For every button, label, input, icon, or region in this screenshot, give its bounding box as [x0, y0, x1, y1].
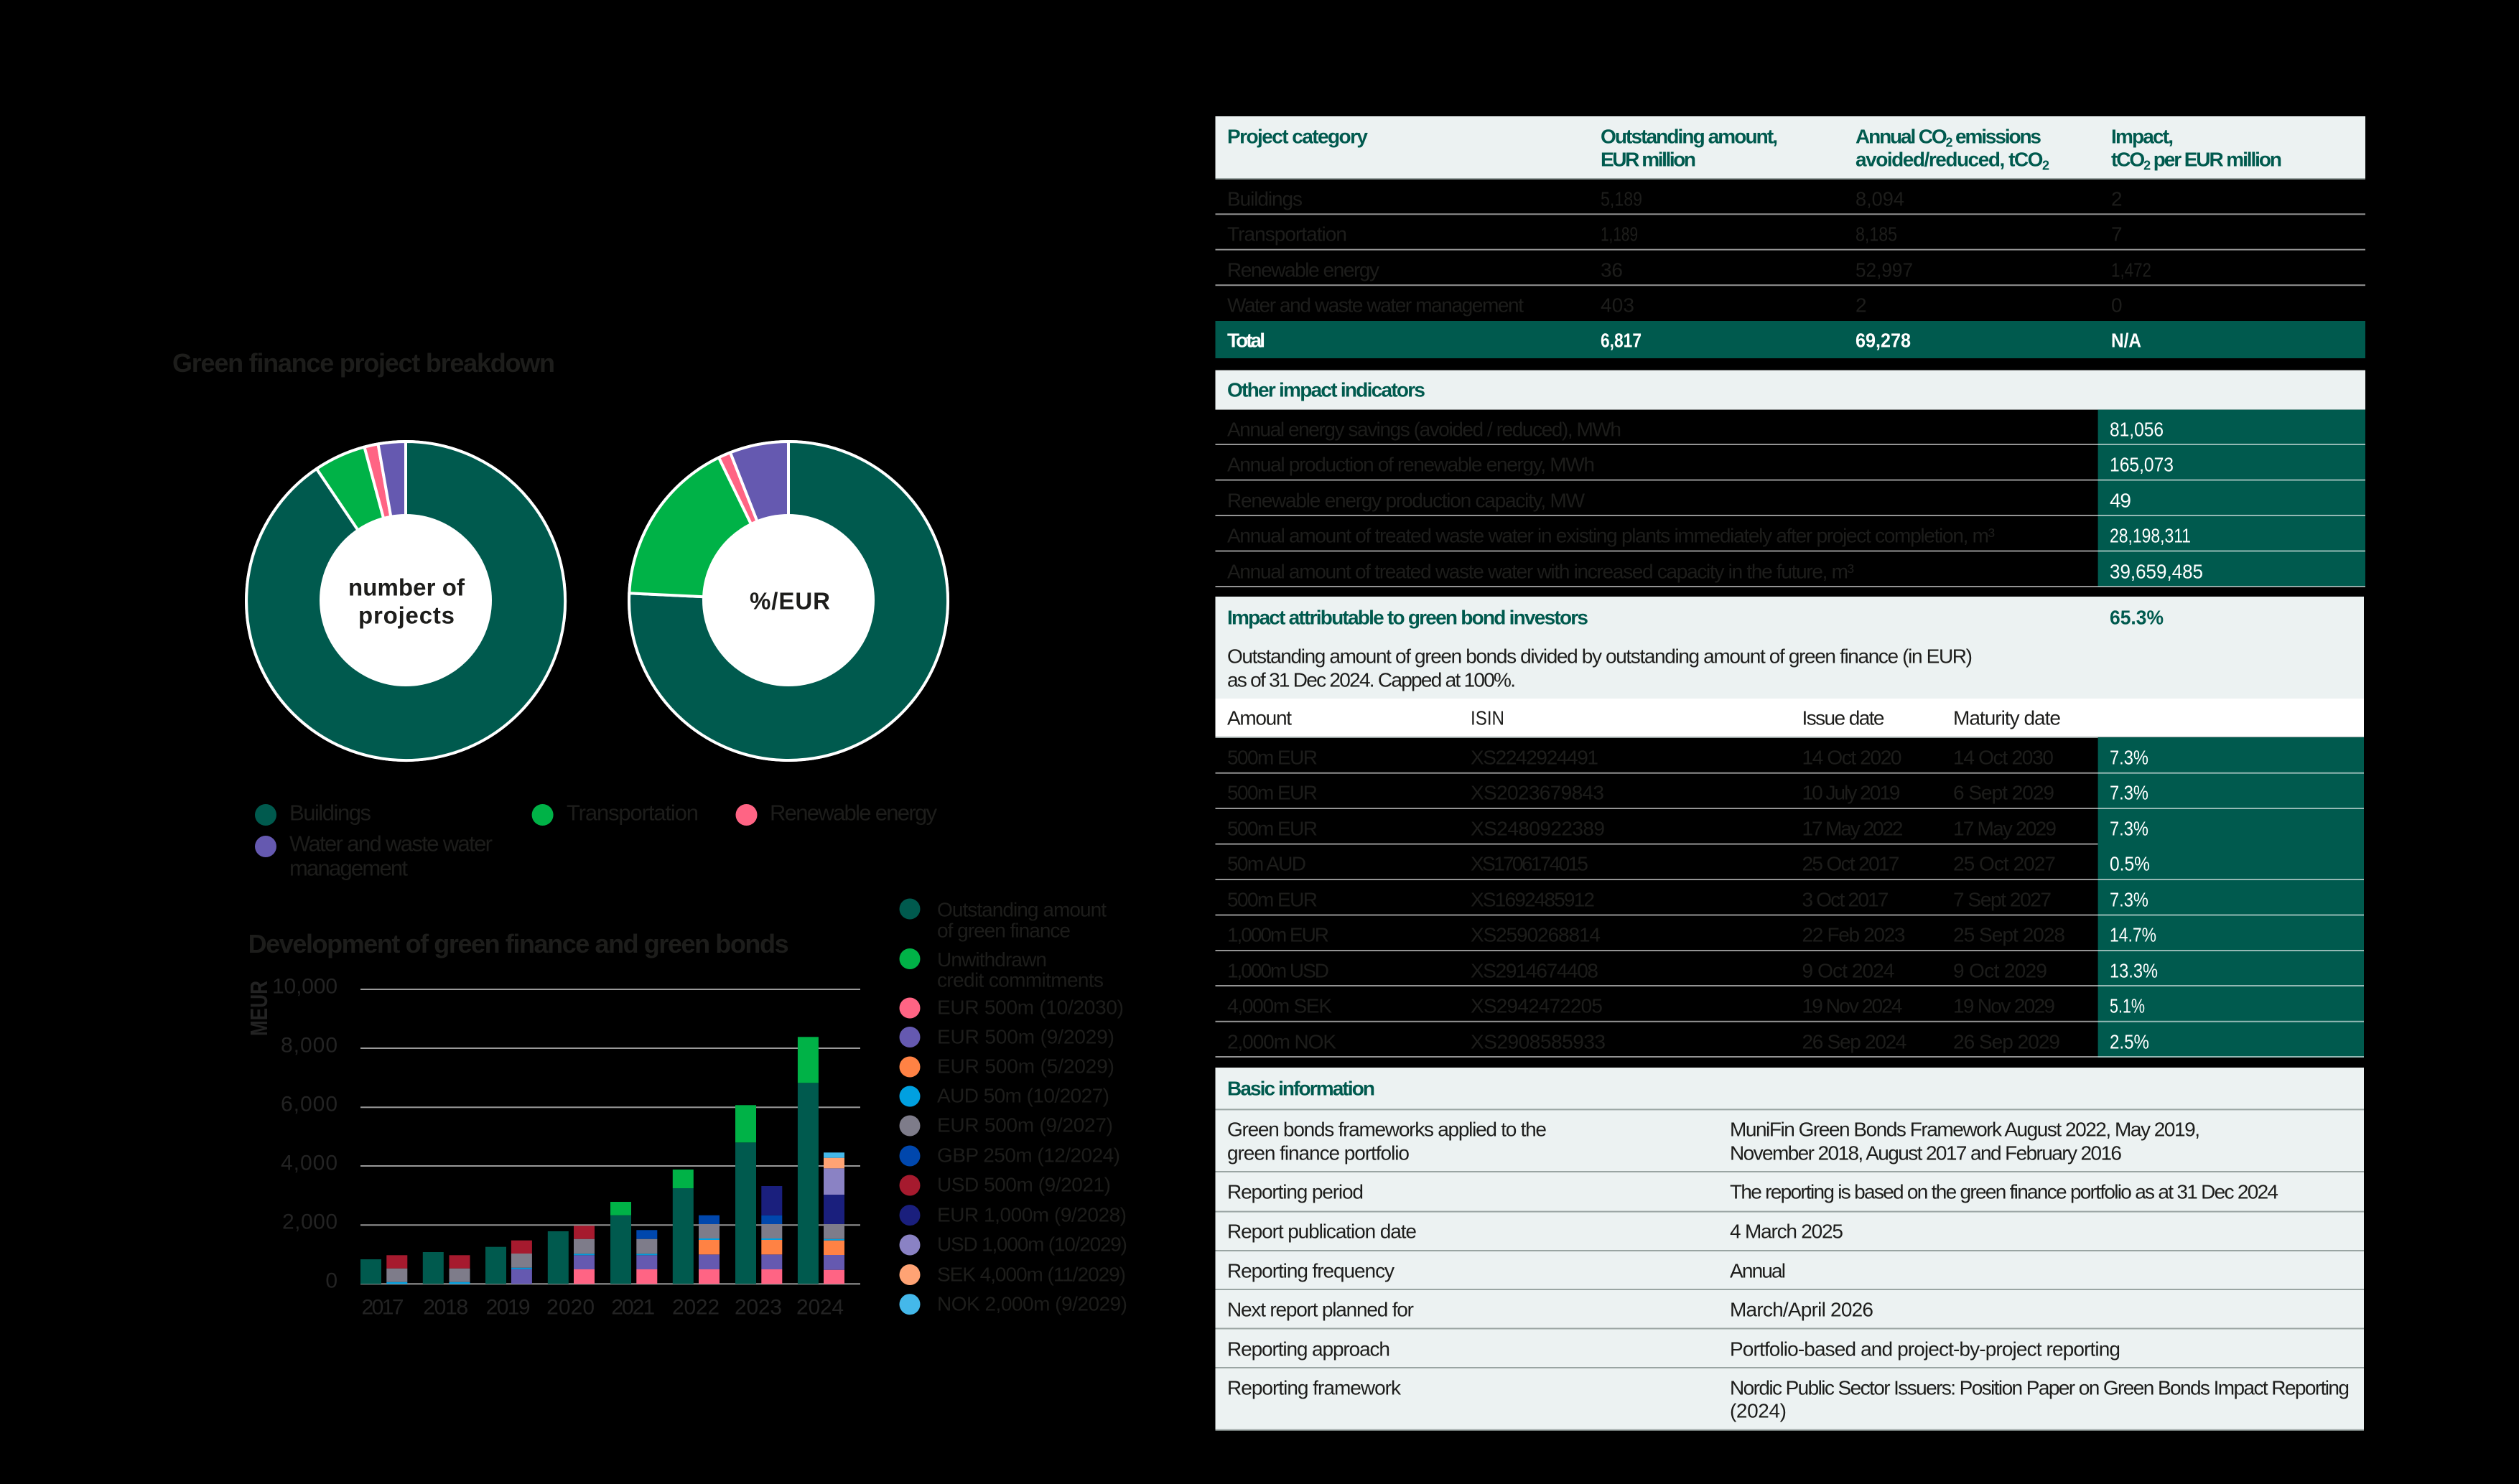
bond rows: 7.3%: [2110, 781, 2148, 804]
row: Transportation: 1,189: [1601, 223, 1638, 246]
bond table column headers: Maturity date: [1953, 706, 2061, 729]
bond rows: 5.1%: [2110, 995, 2145, 1017]
table header: emissions: [1951, 125, 2041, 148]
bond table column headers: Issue date: [1802, 706, 1884, 729]
row: Transportation: 7: [2111, 223, 2123, 246]
bond rows: 17 May 2029: [1953, 817, 2057, 840]
bond rows: 25 Oct 2017: [1802, 853, 1900, 874]
heading: Development of green finance and green bonds: Development of green finance and green bonds: [248, 929, 789, 958]
row: Total: Total: [1227, 329, 1265, 352]
bond rows: 14.7%: [2110, 923, 2156, 946]
row: Total: N/A: [2111, 329, 2141, 352]
green bond stacked bars: [386, 1152, 844, 1284]
row: frequency: Annual: [1730, 1259, 1786, 1282]
row: Total: [1215, 321, 2365, 358]
y axis labels: 6,000: [281, 1093, 337, 1116]
legend: project categories: Transportation: [567, 800, 699, 826]
panel: impact attributable to green bond investors: [1215, 597, 2364, 1058]
section heading: Basic information: [1227, 1077, 1375, 1100]
bond rows: XS2914674408: [1471, 959, 1598, 982]
bond rows: 17 May 2022: [1802, 817, 1903, 840]
legend: green finance and bonds: USD 1,000m (10/2029): [937, 1233, 1127, 1255]
bond rows: XS2242924491: [1471, 747, 1598, 768]
row: Total: 6,817: [1601, 329, 1642, 352]
row: publication date: Report publication date: [1227, 1221, 1417, 1242]
row: Buildings: [1215, 188, 2365, 215]
row: frameworks: green finance portfolio: [1227, 1142, 1410, 1165]
bond rows: 500m EUR: [1227, 781, 1318, 804]
legend: project categories: management: [289, 856, 408, 880]
row: framework: Nordic Public Sector Issuers: Position Paper on Green Bonds Impact Reporting: [1730, 1377, 2350, 1399]
bond rows: 7.3%: [2110, 747, 2148, 768]
legend: green finance and bonds: AUD 50m (10/2027): [937, 1084, 1109, 1107]
table header: EUR million: [1601, 148, 1696, 171]
bond rows: 7 Sept 2027: [1953, 889, 2052, 910]
bond rows: 19 Nov 2024: [1802, 995, 1903, 1017]
bond rows: 2.5%: [2110, 1031, 2149, 1053]
bond rows: 26 Sep 2024: [1802, 1031, 1907, 1053]
y axis title: MEUR: [246, 981, 272, 1036]
y axis labels: 2,000: [282, 1210, 337, 1233]
row: framework: (2024): [1730, 1400, 1787, 1422]
bond rows: 22 Feb 2023: [1802, 923, 1906, 946]
legend: green finance and bonds: EUR 1,000m (9/2028): [937, 1203, 1127, 1226]
bond rows: 6 Sept 2029: [1953, 781, 2054, 804]
row: Transportation: 8,185: [1856, 223, 1897, 246]
heading: Green finance project breakdown: Green finance project breakdown: [172, 348, 555, 378]
panel: other impact indicators: [1215, 370, 2365, 587]
bond table column headers: Amount: [1227, 706, 1292, 729]
x axis labels: 2018: [423, 1295, 468, 1320]
row: frameworks: [1215, 1109, 2364, 1165]
row: approach: [1215, 1328, 2364, 1360]
bond rows: 500m EUR: [1227, 889, 1318, 910]
row: Water and waste water management: [1227, 294, 2123, 316]
y axis labels: 10,000: [272, 975, 337, 998]
bond rows: [1215, 747, 2364, 1058]
bond rows: 50m AUD: [1227, 853, 1306, 874]
table header: Annual CO: [1856, 125, 1947, 148]
legend: green finance and bonds: USD 500m (9/2021): [937, 1173, 1111, 1196]
table header: 2: [1946, 135, 1953, 149]
x axis labels: 2021: [611, 1295, 655, 1320]
row: framework: [1215, 1367, 2364, 1431]
x axis labels: 2017: [362, 1295, 404, 1320]
row: Renewable energy: 36: [1601, 258, 1623, 281]
bond rows: 25 Sept 2028: [1953, 923, 2065, 946]
bond rows: 19 Nov 2029: [1953, 995, 2055, 1017]
row: Total: 69,278: [1856, 329, 1911, 352]
indicator rows: Renewable energy production capacity, MW: [1227, 490, 1586, 511]
indicator rows: 49: [2110, 490, 2131, 511]
indicator rows: Annual amount of treated waste water with increased capacity in the future, m³: [1227, 560, 1854, 583]
legend: green finance and bonds: Unwithdrawn: [937, 948, 1047, 971]
bond rows: 9 Oct 2024: [1802, 959, 1894, 982]
row: Buildings: Buildings: [1227, 188, 1303, 210]
row: Transportation: Transportation: [1227, 223, 1347, 246]
bond rows: 26 Sep 2029: [1953, 1031, 2060, 1053]
table header: Impact,: [2111, 125, 2174, 148]
bond rows: 2,000m NOK: [1227, 1031, 1336, 1053]
row: frameworks: November 2018, August 2017 and February 2016: [1730, 1142, 2122, 1165]
bond rows: 25 Oct 2027: [1953, 853, 2056, 874]
bond rows: 0.5%: [2110, 853, 2150, 874]
row: next report: [1215, 1289, 2364, 1321]
row: Water and waste water management: 403: [1601, 294, 1634, 316]
legend: project categories: Water and waste water: [289, 831, 493, 856]
bond rows: 500m EUR: [1227, 747, 1318, 768]
row: next report: March/April 2026: [1730, 1298, 1873, 1321]
row: Buildings: 5,189: [1601, 188, 1642, 210]
row: Buildings: 2: [2111, 188, 2123, 210]
legend: green finance and bonds: SEK 4,000m (11/2029): [937, 1264, 1126, 1285]
legend: green finance and bonds: EUR 500m (9/2027): [937, 1114, 1113, 1136]
legend: green finance and bonds: GBP 250m (12/2024): [937, 1144, 1120, 1166]
legend: project categories: Buildings: [289, 800, 371, 826]
section header: Other impact indicators: [1227, 379, 1425, 401]
bond rows: XS2023679843: [1471, 781, 1604, 804]
y axis labels: 4,000: [281, 1152, 337, 1175]
y axis labels: [272, 975, 337, 1292]
indicator rows: 165,073: [2110, 454, 2174, 475]
bond rows: 14 Oct 2020: [1802, 747, 1901, 768]
row: Renewable energy: 1,472: [2111, 258, 2151, 281]
bond rows: 1,000m USD: [1227, 959, 1329, 982]
bond rows: 1,000m EUR: [1227, 923, 1329, 946]
bond rows: XS1706174015: [1471, 853, 1588, 874]
row: publication date: 4 March 2025: [1730, 1221, 1843, 1242]
panel: project category table: [1215, 116, 2365, 358]
y axis labels: 0: [325, 1269, 337, 1292]
row: next report: Next report planned for: [1227, 1298, 1414, 1321]
bond rows: 7.3%: [2110, 889, 2148, 910]
bond rows: 7.3%: [2110, 817, 2148, 840]
section header: 65.3%: [2110, 606, 2164, 629]
section header: as of 31 Dec 2024. Capped at 100%.: [1227, 669, 1516, 691]
legend: project categories: Renewable energy: [770, 800, 938, 826]
row: frequency: Reporting frequency: [1227, 1259, 1394, 1282]
legend: green finance and bonds: credit commitments: [937, 969, 1104, 991]
section header: [1215, 370, 2365, 410]
row: approach: Reporting approach: [1227, 1338, 1390, 1360]
row: publication date: [1215, 1211, 2364, 1242]
green finance bars: [360, 1037, 819, 1284]
row: reporting period: [1215, 1171, 2364, 1203]
legend: green finance and bonds: of green finance: [937, 919, 1071, 942]
bond rows: 3 Oct 2017: [1802, 889, 1889, 910]
table header: 2: [2143, 158, 2151, 172]
bond rows: 14 Oct 2030: [1953, 747, 2054, 768]
legend: green finance and bonds: [899, 899, 1127, 1315]
table header: Project category: [1227, 125, 1368, 148]
x axis labels: [362, 1295, 844, 1320]
row: frameworks: MuniFin Green Bonds Framework August 2022, May 2019,: [1730, 1119, 2200, 1140]
row: reporting period: The reporting is based on the green finance portfolio as at 31 Dec 2024: [1730, 1180, 2278, 1203]
bond table column headers: ISIN: [1471, 706, 1504, 729]
indicator rows: 81,056: [2110, 418, 2164, 441]
section header: [1215, 597, 2364, 699]
table header: avoided/reduced, tCO: [1856, 148, 2043, 171]
row: reporting period: Reporting period: [1227, 1180, 1364, 1203]
x axis labels: 2019: [486, 1295, 531, 1320]
bond rows: 500m EUR: [1227, 817, 1318, 840]
donut chart: % per EUR: %/EUR: [750, 587, 830, 615]
share column: [2098, 737, 2364, 1058]
row: Water and waste water management: 2: [1856, 294, 1867, 316]
indicator rows: Annual energy savings (avoided / reduced), MWh: [1227, 418, 1621, 441]
donut chart: number of projects: projects: [358, 602, 455, 629]
bar chart: development of green finance and green bonds: [246, 975, 860, 1320]
legend: green finance and bonds: EUR 500m (9/2029): [937, 1025, 1114, 1048]
table header: tCO: [2111, 148, 2145, 171]
row: Renewable energy: Renewable energy: [1227, 258, 1379, 281]
donut chart: % per EUR: [628, 440, 949, 762]
bond rows: 9 Oct 2029: [1953, 959, 2047, 982]
legend: green finance and bonds: Outstanding amount: [937, 899, 1107, 920]
row: Water and waste water management: Water and waste water management: [1227, 294, 1524, 316]
x axis labels: 2024: [796, 1295, 844, 1320]
legend: green finance and bonds: NOK 2,000m (9/2029): [937, 1292, 1127, 1315]
section header: Impact attributable to green bond investors: [1227, 606, 1588, 629]
bond rows: 13.3%: [2110, 959, 2158, 982]
bond rows: 10 July 2019: [1802, 781, 1900, 804]
row: frequency: [1215, 1250, 2364, 1282]
indicator rows: [1215, 418, 2365, 587]
row: Transportation: [1215, 223, 2365, 251]
x axis labels: 2020: [546, 1295, 595, 1320]
value column: [2098, 410, 2365, 587]
bond rows: 4,000m SEK: [1227, 995, 1332, 1017]
donut chart: number of projects: number of: [348, 574, 465, 600]
row: Renewable energy: 52,997: [1856, 258, 1913, 281]
legend: green finance and bonds: EUR 500m (10/2030): [937, 997, 1124, 1018]
bond rows: XS1692485912: [1471, 889, 1595, 910]
bond rows: XS2908585933: [1471, 1031, 1606, 1053]
table header: Outstanding amount,: [1601, 125, 1778, 148]
table header: [1215, 116, 2365, 179]
bond rows: XS2942472205: [1471, 995, 1603, 1017]
row: framework: Reporting framework: [1227, 1377, 1402, 1399]
indicator rows: Annual amount of treated waste water in existing plants immediately after project completion, m³: [1227, 524, 1995, 547]
bond rows: XS2590268814: [1471, 923, 1601, 946]
row: Water and waste water management: 0: [2111, 294, 2123, 316]
x axis labels: 2022: [672, 1295, 720, 1320]
table header: per EUR million: [2149, 148, 2282, 171]
indicator rows: 28,198,311: [2110, 524, 2191, 547]
bond rows: XS2480922389: [1471, 817, 1605, 840]
row: Renewable energy: [1215, 258, 2365, 286]
legend: green finance and bonds: EUR 500m (5/2029): [937, 1055, 1114, 1077]
donut chart: number of projects: [245, 440, 567, 762]
y axis labels: 8,000: [281, 1034, 337, 1057]
row: frameworks: Green bonds frameworks applied to the: [1227, 1119, 1547, 1140]
section header: Outstanding amount of green bonds divided by outstanding amount of green finance (in EUR): [1227, 645, 1973, 668]
panel: basic information: [1215, 1068, 2364, 1431]
row: Buildings: 8,094: [1856, 188, 1904, 210]
legend: project categories: [255, 800, 938, 880]
bond table column headers: [1215, 699, 2364, 738]
table header: 2: [2042, 158, 2049, 172]
x axis labels: 2023: [735, 1295, 782, 1320]
indicator rows: 39,659,485: [2110, 560, 2203, 583]
indicator rows: Annual production of renewable energy, MWh: [1227, 454, 1595, 475]
row: approach: Portfolio-based and project-by-project reporting: [1730, 1338, 2120, 1360]
